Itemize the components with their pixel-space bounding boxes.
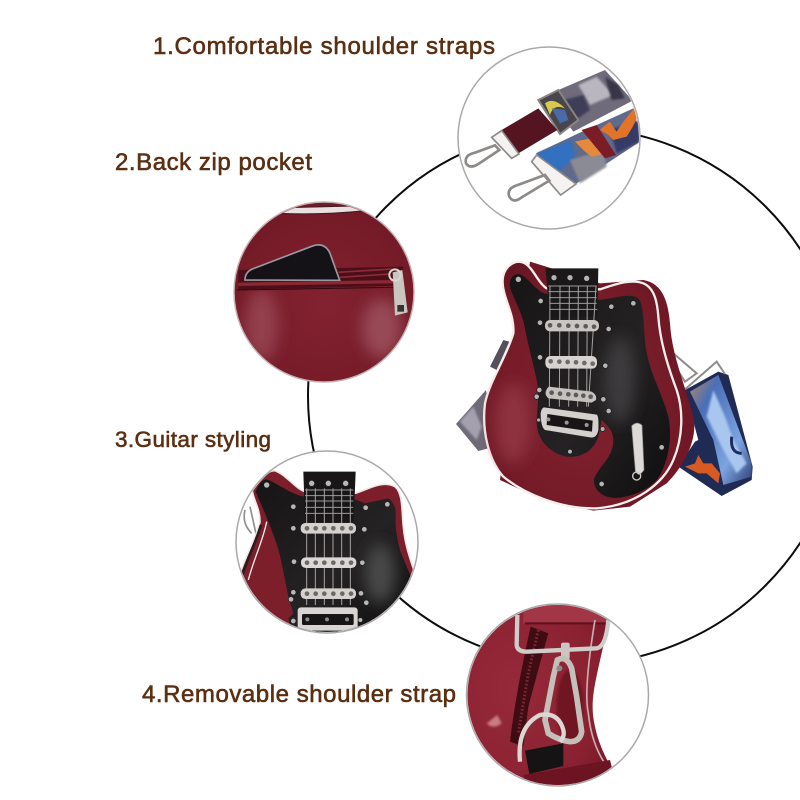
- strap hook: [662, 348, 725, 389]
- bridge: [298, 607, 358, 631]
- zipper: [510, 627, 548, 747]
- black pickguard: [510, 274, 670, 498]
- left strap end: [456, 340, 509, 451]
- panel: guitar styling close-up circle: [236, 451, 418, 637]
- red body: [238, 471, 417, 637]
- pickup 1: [301, 523, 356, 534]
- label 3: guitar styling: 3.Guitar styling: [115, 427, 271, 452]
- frets: [305, 490, 353, 513]
- left hardware: [244, 507, 257, 537]
- lower patterned strap: [536, 108, 640, 187]
- bridge: [541, 407, 598, 438]
- burgundy leather tab: [502, 108, 557, 153]
- panel: straps close-up circle: [458, 47, 640, 229]
- pickup 3: [546, 387, 596, 403]
- pickup 1: [545, 320, 599, 331]
- leather keeper: [582, 125, 616, 158]
- strings: [307, 488, 350, 605]
- leather mottling: [495, 383, 532, 463]
- upper hook: [466, 131, 519, 167]
- pickguard studs: [515, 275, 664, 487]
- black tab: [525, 743, 563, 774]
- main product: guitar-shaped bag: [456, 262, 753, 511]
- right strap: [678, 372, 753, 496]
- red bag side: [468, 605, 611, 785]
- snap hook: [545, 643, 582, 742]
- lower seam: [524, 760, 612, 785]
- top white edge: [280, 206, 362, 214]
- left dark edging: [242, 525, 261, 577]
- pocket leather: [235, 203, 413, 380]
- red body face with white edge: [484, 262, 681, 508]
- D ring: [517, 615, 608, 652]
- rear body side: [500, 262, 694, 511]
- pickup 2: [545, 356, 597, 369]
- pickup 2: [301, 557, 356, 568]
- orange graffiti shapes: [575, 108, 637, 157]
- upper patterned strap: [559, 70, 632, 132]
- strings: [549, 286, 596, 407]
- label 4: removable shoulder strap: 4.Removable shoulder strap: [142, 681, 456, 708]
- O ring: [520, 714, 564, 762]
- label 2: back zip pocket: 2.Back zip pocket: [115, 149, 312, 176]
- frets: [548, 286, 597, 309]
- panel: removable strap close-up circle: [466, 603, 650, 787]
- neck studs: [264, 480, 390, 624]
- title label 1: comfortable shoulder straps: 1.Comfortable shoulder straps: [153, 33, 495, 60]
- large connecting circle: [308, 128, 800, 664]
- metal slider buckle: [538, 90, 578, 134]
- phone: [245, 245, 340, 280]
- panel: back zip pocket close-up circle: [233, 201, 415, 383]
- black pickguard: [256, 479, 413, 632]
- zip puller: [389, 269, 408, 316]
- neck: [546, 268, 598, 317]
- pickup 3: [301, 588, 356, 599]
- zipper teeth: [238, 282, 395, 284]
- zipper opening: [238, 267, 403, 290]
- lower hook: [509, 155, 576, 201]
- neck: [303, 472, 356, 522]
- control plate: [632, 423, 644, 480]
